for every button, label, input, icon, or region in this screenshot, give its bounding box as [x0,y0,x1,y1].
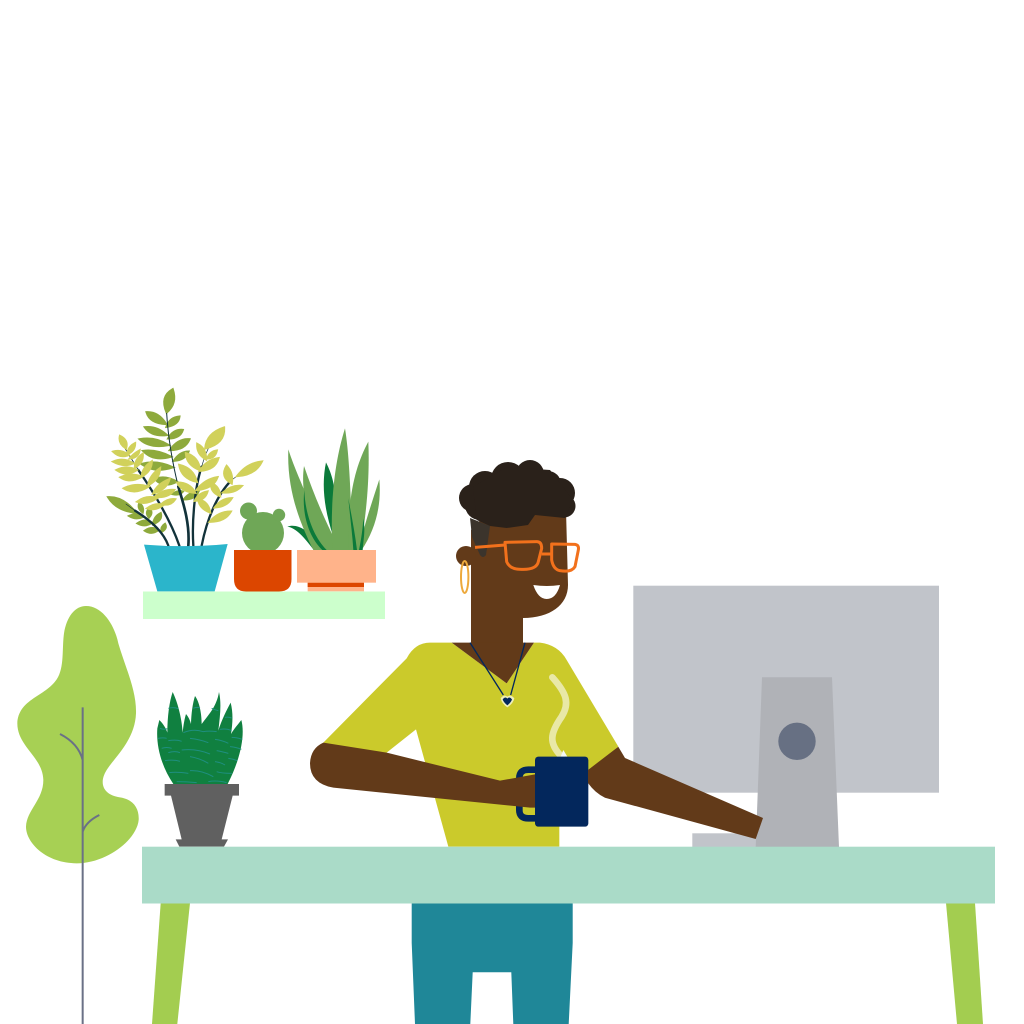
ear [456,546,476,566]
earring [461,561,468,593]
keyboard [692,833,758,847]
monitor screen back [633,586,939,793]
computer monitor [633,586,939,847]
snake plant in peach pot [287,428,380,591]
dark leaves [287,462,336,549]
aloe leaf stripes [158,707,242,783]
fern plant in blue pot [108,389,262,591]
monitor button [778,723,816,760]
hair [459,460,576,528]
mug handle [519,770,538,818]
fern stems [125,413,247,546]
dark streaks [304,490,364,550]
aloe leaves [157,692,243,784]
glasses [475,542,579,571]
fern back leaves [108,389,198,533]
blue pot [144,544,228,591]
neck V [452,643,534,683]
side hair [470,518,490,557]
cactus [240,502,285,554]
necklace [470,643,525,707]
wall shelf [143,592,385,619]
aloe plant in grey pot [157,692,243,847]
trousers [412,903,573,1024]
left arm and hand [310,743,535,808]
body and arms [310,643,618,847]
grey pot [165,784,239,847]
cactus in orange pot [234,502,292,592]
woman [310,460,763,847]
steam [552,677,567,757]
monitor stand [756,677,839,847]
desk legs [152,903,983,1024]
desk top [142,847,995,904]
tree [17,606,139,1024]
smile [533,585,560,599]
peach pot [297,550,376,591]
mug [535,757,588,827]
shirt [323,643,618,847]
green leaves [288,428,380,550]
right arm [588,747,763,839]
head and neck [471,510,568,645]
orange pot [234,550,292,592]
fern front leaves [113,428,262,522]
